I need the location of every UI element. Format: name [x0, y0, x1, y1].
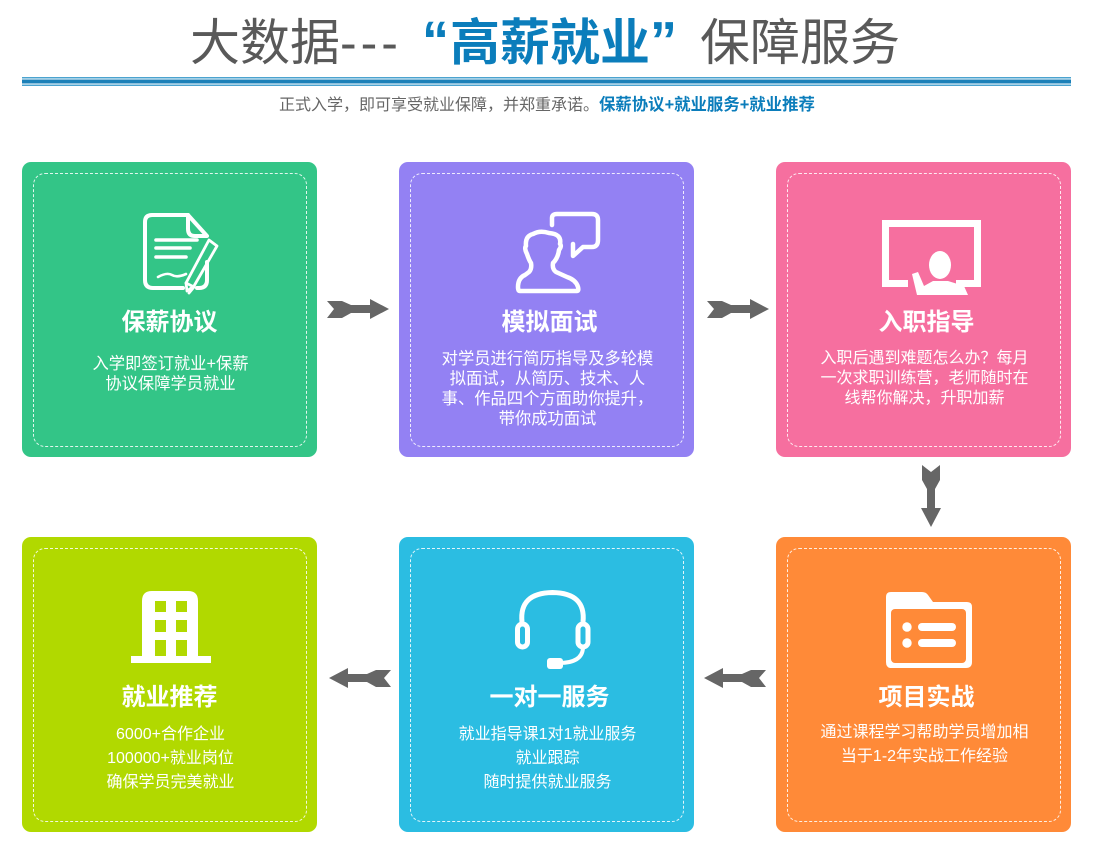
panel: 模拟面试: [399, 162, 694, 457]
title: 保障服务: [700, 15, 900, 71]
heading: 就业推荐: [122, 684, 218, 711]
panel: 一对一服务: [399, 537, 694, 832]
arrow: left 1: [704, 668, 766, 688]
description: 通过课程学习帮助学员增加相: [820, 724, 1028, 741]
title: 大数据: [190, 15, 340, 71]
description: [106, 725, 234, 791]
description: 一次求职训练营，老师随时在: [820, 370, 1028, 387]
heading: 项目实战: [878, 684, 974, 711]
description: 随时提供就业服务: [483, 774, 612, 791]
arrow: down: [921, 465, 941, 527]
description: [820, 349, 1028, 407]
heading: 入职指导: [878, 309, 974, 336]
description: 100000+就业岗位: [107, 750, 234, 767]
description: [459, 725, 636, 791]
description: 当于1-2年实战工作经验: [841, 748, 1008, 765]
icon: office building: [131, 591, 211, 663]
description: 带你成功面试: [499, 410, 596, 428]
icon: person and speech bubble: [516, 212, 600, 294]
arrow: left 2: [329, 668, 391, 688]
title divider: [22, 77, 1071, 86]
panel: 保薪协议: [22, 162, 317, 457]
panel: 项目实战: [776, 537, 1071, 832]
description: [820, 723, 1028, 765]
title: ”: [650, 11, 677, 71]
description: 入职后遇到难题怎么办？每月: [820, 350, 1028, 367]
arrow: right 2: [707, 299, 769, 319]
description: 就业指导课1对1就业服务: [459, 726, 636, 743]
title: 高薪就业: [450, 15, 650, 71]
icon: headset: [515, 590, 590, 669]
description: 就业跟踪: [515, 750, 580, 767]
title: [190, 11, 900, 71]
description: 拟面试，从简历、技术、人: [450, 370, 645, 388]
description: 入学即签订就业+保薪: [92, 355, 249, 373]
title: ---: [340, 15, 402, 71]
description: [92, 354, 249, 393]
heading: 保薪协议: [122, 309, 218, 336]
icon: document and pen: [143, 213, 218, 294]
icon: folder with list: [886, 592, 972, 668]
icon: presenter at screen: [882, 220, 981, 295]
description: [442, 350, 653, 428]
description: 确保学员完美就业: [106, 774, 234, 791]
heading: 模拟面试: [502, 309, 598, 336]
subtitle: 正式入学，即可享受就业保障，并郑重承诺。保薪协议+就业服务+就业推荐: [279, 96, 815, 114]
description: 线帮你解决，升职加薪: [844, 390, 1004, 407]
panel: 入职指导: [776, 162, 1071, 457]
description: 对学员进行简历指导及多轮模: [442, 350, 653, 368]
arrow: right 1: [327, 299, 389, 319]
description: 事、作品四个方面助你提升，: [442, 390, 653, 408]
description: 协议保障学员就业: [105, 375, 236, 393]
heading: 一对一服务: [490, 684, 610, 711]
description: 6000+合作企业: [116, 726, 225, 743]
panel: 就业推荐: [22, 537, 317, 832]
title: “: [422, 11, 449, 71]
